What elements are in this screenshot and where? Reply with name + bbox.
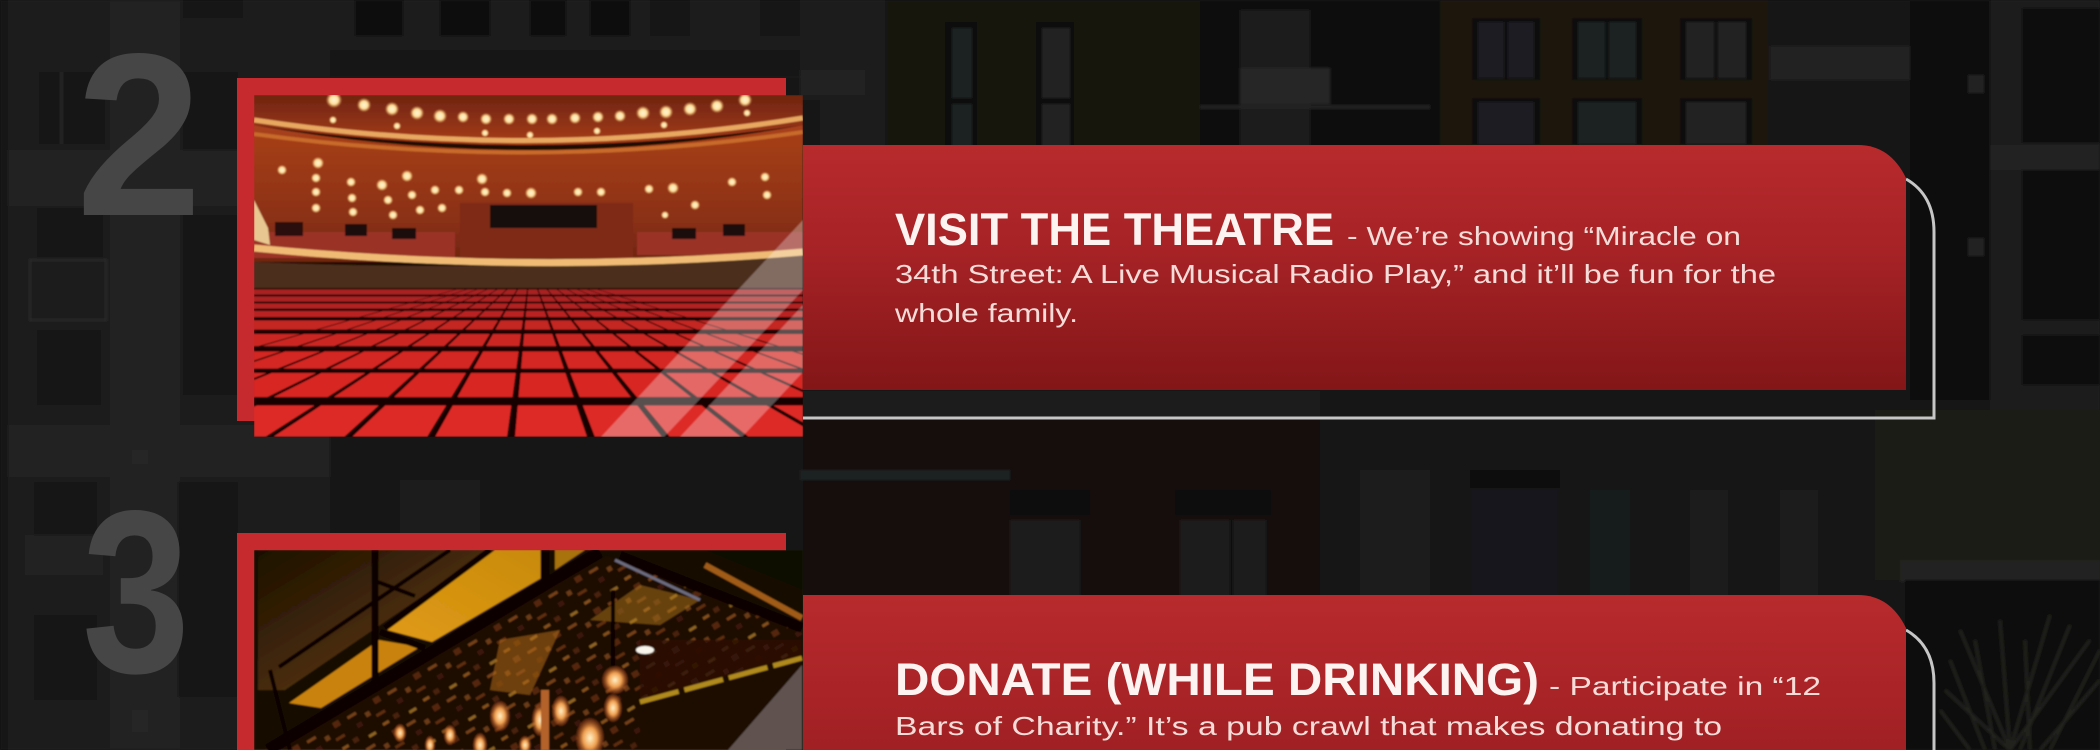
body text: - Participate in “12: [1549, 671, 1821, 701]
item 2: red text panel: [803, 145, 1906, 390]
heading: visit the theatre: VISIT THE THEATRE: [895, 204, 1334, 255]
theatre photo: [254, 95, 803, 437]
red photo frame: [237, 533, 786, 750]
converging aisle lines between seats: [254, 288, 803, 437]
item 3: donate: [237, 533, 803, 750]
body text: 34th Street: A Live Musical Radio Play,” and it’ll be fun for the: [895, 259, 1776, 289]
brown brick tower left: [888, 0, 1208, 146]
item 2: theatre: [237, 78, 803, 437]
lower street-level facade: [330, 391, 2100, 750]
black beams: [268, 550, 803, 750]
number 2: 2: [76, 6, 202, 265]
body text: - We’re showing “Miracle on: [1347, 221, 1741, 251]
white diagonal stripes overlay: [601, 220, 803, 437]
upper middle grey building: [330, 0, 885, 150]
white diagonal stripe overlay: [728, 665, 802, 750]
dark balcony column: [1122, 0, 1440, 145]
item 3: white outline behind panel: [1906, 630, 1934, 750]
red photo frame: [237, 78, 786, 421]
seat rows: [254, 288, 803, 437]
item 3: red text panel: [803, 595, 1906, 750]
item 2: white outline behind panel: [803, 179, 1934, 418]
heading: donate while drinking: DONATE (WHILE DRINKING): [895, 654, 1539, 705]
left grey building: [0, 0, 330, 750]
number 3: 3: [82, 463, 190, 722]
palm fronds bottom right: [1940, 615, 2100, 750]
bar photo: [254, 550, 803, 750]
right balconies and far tower: [1768, 0, 2100, 750]
brown brick tower right: [1440, 0, 1770, 145]
hanging bulbs: [394, 646, 654, 750]
body text: Bars of Charity.” It’s a pub crawl that makes donating to: [895, 711, 1722, 741]
body text: whole family.: [894, 298, 1078, 328]
ceiling and wall lights: [277, 92, 772, 220]
